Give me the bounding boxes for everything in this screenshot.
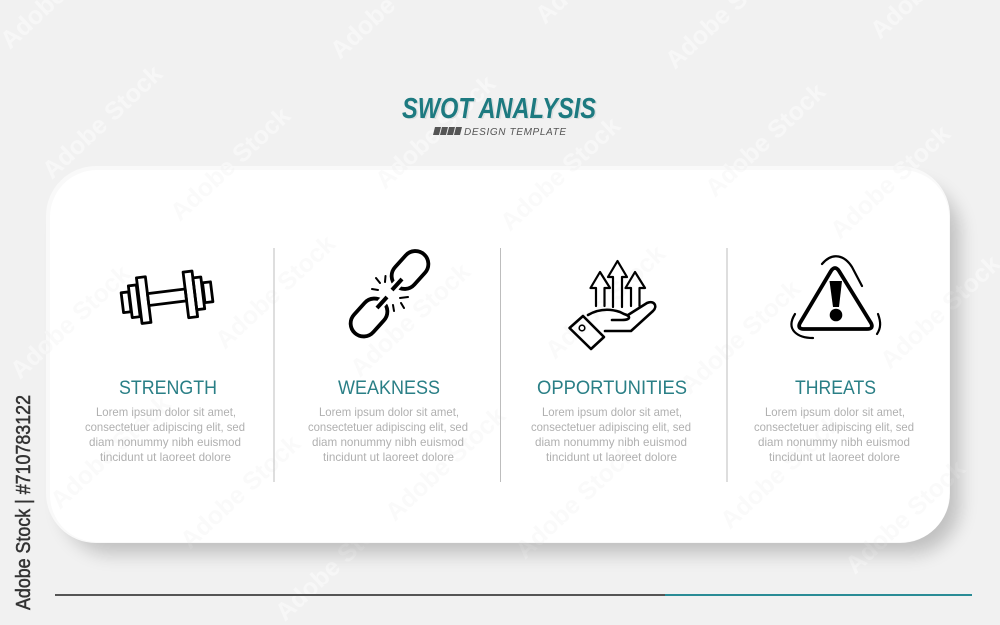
text: Adobe Stock — [715, 410, 846, 534]
panel: main card — [46, 166, 960, 554]
icon: dumbbell — [120, 269, 214, 326]
text block: weakness: diam nonummy nibh euismod — [312, 435, 464, 449]
text: Adobe Stock — [510, 440, 641, 564]
text: Adobe Stock — [370, 70, 501, 194]
text: Adobe Stock — [700, 78, 831, 202]
text: Adobe Stock — [495, 112, 626, 236]
text: Adobe Stock — [825, 120, 956, 244]
icon: broken chain link — [345, 246, 434, 342]
text block: strength: consectetuer adipiscing elit, sed — [85, 420, 245, 434]
text: Adobe Stock — [675, 275, 806, 399]
text: Adobe Stock — [825, 120, 956, 244]
icon: warning triangle — [791, 256, 880, 338]
text: Adobe Stock — [270, 502, 401, 625]
text: Adobe Stock — [37, 60, 168, 184]
text block: threats: Lorem ipsum dolor sit amet, — [765, 405, 905, 419]
text block: opportunities: consectetuer adipiscing elit, sed — [531, 420, 691, 434]
footer rule — [55, 594, 972, 596]
heading: strength: STRENGTH — [119, 378, 217, 399]
text block: strength: tincidunt ut laoreet dolore — [100, 450, 231, 464]
text: Adobe Stock — [5, 260, 136, 384]
icon: hand with rising arrows — [570, 261, 655, 349]
text: Adobe Stock — [840, 455, 971, 579]
heading: opportunities: OPPORTUNITIES — [537, 378, 687, 399]
text: Adobe Stock — [45, 390, 176, 514]
text block: threats: tincidunt ut laoreet dolore — [769, 450, 900, 464]
text block: opportunities: Lorem ipsum dolor sit amet, — [542, 405, 682, 419]
text: Adobe Stock — [37, 60, 168, 184]
text block: opportunities — [531, 405, 691, 464]
title: SWOT ANALYSIS — [402, 93, 597, 125]
text block: strength: diam nonummy nibh euismod — [89, 435, 241, 449]
text: Adobe Stock — [380, 402, 511, 526]
text: Adobe Stock — [510, 440, 641, 564]
text: Adobe Stock — [700, 78, 831, 202]
text block: strength: Lorem ipsum dolor sit amet, — [96, 405, 236, 419]
text block: weakness — [308, 405, 468, 464]
divider 3 — [726, 248, 728, 482]
text block: weakness: tincidunt ut laoreet dolore — [323, 450, 454, 464]
text: Adobe Stock — [45, 390, 176, 514]
text: Adobe Stock — [5, 260, 136, 384]
divider 1 — [273, 248, 275, 482]
heading: threats: THREATS — [795, 378, 876, 399]
title: SWOT ANALYSIS — [404, 94, 598, 126]
text block: threats: consectetuer adipiscing elit, sed — [754, 420, 914, 434]
text block: weakness: consectetuer adipiscing elit, sed — [308, 420, 468, 434]
text: Adobe Stock — [210, 230, 341, 354]
heading: weakness: WEAKNESS — [338, 378, 440, 399]
subtitle: design template: DESIGN TEMPLATE — [464, 127, 566, 138]
text block: opportunities: diam nonummy nibh euismod — [535, 435, 687, 449]
text block: threats — [754, 405, 914, 464]
text block: strength — [85, 405, 245, 464]
text: Adobe Stock — [370, 70, 501, 194]
text: Adobe Stock — [840, 455, 971, 579]
text block: weakness: Lorem ipsum dolor sit amet, — [319, 405, 459, 419]
stock id watermark: Adobe Stock | #710783122 — [13, 395, 35, 610]
text: Adobe Stock — [345, 258, 476, 382]
divider 2 — [500, 248, 502, 482]
text: Adobe Stock — [165, 102, 296, 226]
text block: threats: diam nonummy nibh euismod — [758, 435, 910, 449]
text: Adobe Stock — [495, 112, 626, 236]
text: Adobe Stock — [175, 430, 306, 554]
text: Adobe Stock — [715, 410, 846, 534]
text: Adobe Stock — [540, 240, 671, 364]
text: Adobe Stock — [165, 102, 296, 226]
text: Adobe Stock — [175, 430, 306, 554]
text block: opportunities: tincidunt ut laoreet dolore — [546, 450, 677, 464]
